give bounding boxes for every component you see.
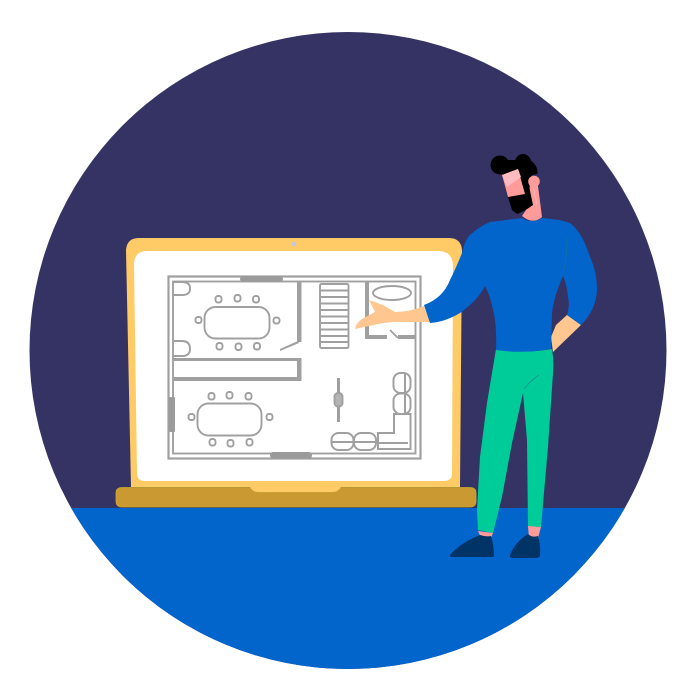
sofa — [332, 373, 410, 450]
right forearm on hip — [551, 315, 581, 352]
floor plan — [168, 276, 420, 458]
floor — [71, 508, 625, 669]
coffee table — [334, 378, 342, 422]
laptop hinge notch — [250, 487, 341, 492]
webcam — [292, 242, 296, 246]
interior walls — [173, 281, 416, 381]
doors and fixtures — [173, 282, 190, 295]
outer walls — [168, 276, 420, 458]
neck highlight — [533, 186, 537, 205]
top meeting table — [196, 295, 280, 350]
hair and beard — [490, 154, 538, 214]
pointing hand and forearm — [355, 300, 430, 329]
bottom meeting table — [188, 392, 272, 446]
left ankle — [478, 531, 493, 538]
trouser seam — [524, 375, 539, 389]
sleeve seam — [563, 238, 567, 274]
stairs — [320, 284, 348, 348]
laptop screen frame — [126, 238, 462, 487]
right shoe — [510, 534, 540, 558]
ear — [528, 176, 540, 187]
laptop — [116, 238, 476, 507]
blue sweater — [424, 218, 597, 352]
laptop base — [116, 488, 476, 507]
face — [502, 169, 525, 197]
laptop screen white area — [134, 251, 453, 481]
left shoe — [450, 535, 494, 557]
person — [355, 154, 597, 558]
trousers — [477, 349, 553, 533]
windows — [169, 276, 312, 458]
bath fixtures — [373, 286, 411, 300]
right ankle — [528, 526, 541, 538]
face highlight — [502, 169, 521, 187]
neck — [522, 186, 542, 221]
